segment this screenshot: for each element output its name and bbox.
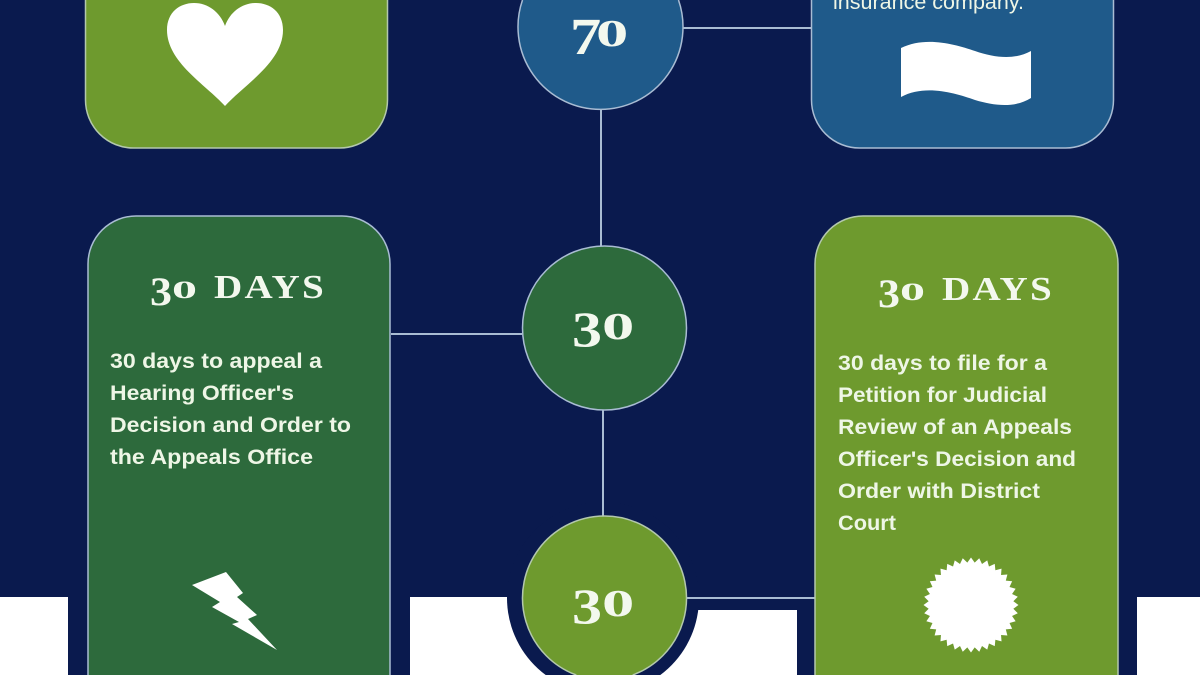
- circle: 70: [518, 0, 683, 109]
- circle: 30 bottom: 3: [572, 579, 602, 634]
- white background blocks at the bottom: [0, 502, 1200, 675]
- icon: heart: [167, 3, 283, 106]
- heading: 30 days: DAYS: [214, 267, 326, 305]
- text: petition for judicial review: Review of an Appeals: [838, 415, 1072, 439]
- heading: 30 days: 0: [900, 278, 925, 306]
- panel: 30 days dark green card: [88, 216, 390, 675]
- text: appeal a hearing officer's decision: 30 days to appeal a: [110, 349, 323, 373]
- heading: 30 days: 3: [878, 273, 900, 317]
- circle: 30: [522, 246, 686, 410]
- text: petition for judicial review: Order with District: [838, 479, 1040, 503]
- circle: 70: 0: [596, 13, 628, 55]
- circle: 30 bottom: [522, 516, 686, 675]
- icon: seal: [924, 558, 1018, 652]
- panel: top left green card with heart: [86, 0, 388, 148]
- circle: 30 bottom: 0: [602, 583, 634, 625]
- text: petition for judicial review: 30 days to file for a: [838, 351, 1048, 375]
- text: petition for judicial review: [838, 351, 1076, 535]
- heading: 30 days: [878, 269, 1054, 317]
- icon: lightning bolt: [192, 572, 277, 650]
- text: petition for judicial review: Petition for Judicial: [838, 383, 1047, 407]
- circle: 30: 3: [572, 302, 602, 357]
- panel: 30 days light green card: [815, 216, 1118, 675]
- text: appeal a hearing officer's decision: the Appeals Office: [110, 445, 313, 469]
- text: appeal a hearing officer's decision: [110, 349, 351, 469]
- text: appeal a hearing officer's decision: Hearing Officer's: [110, 381, 294, 405]
- text: petition for judicial review: Court: [838, 511, 896, 535]
- text: petition for judicial review: Officer's Decision and: [838, 447, 1076, 471]
- heading: 30 days: [150, 267, 326, 315]
- heading: 30 days: 0: [172, 276, 197, 304]
- icon: flag: [901, 42, 1031, 105]
- heading: 30 days: DAYS: [942, 269, 1054, 307]
- circle: 70: 7: [570, 9, 601, 66]
- connector lines: [391, 28, 815, 598]
- heading: 30 days: 3: [150, 271, 172, 315]
- panel: top right blue card with flag: [812, 0, 1114, 148]
- circle: 30: 0: [602, 306, 634, 348]
- text: appeal a hearing officer's decision: Decision and Order to: [110, 413, 351, 437]
